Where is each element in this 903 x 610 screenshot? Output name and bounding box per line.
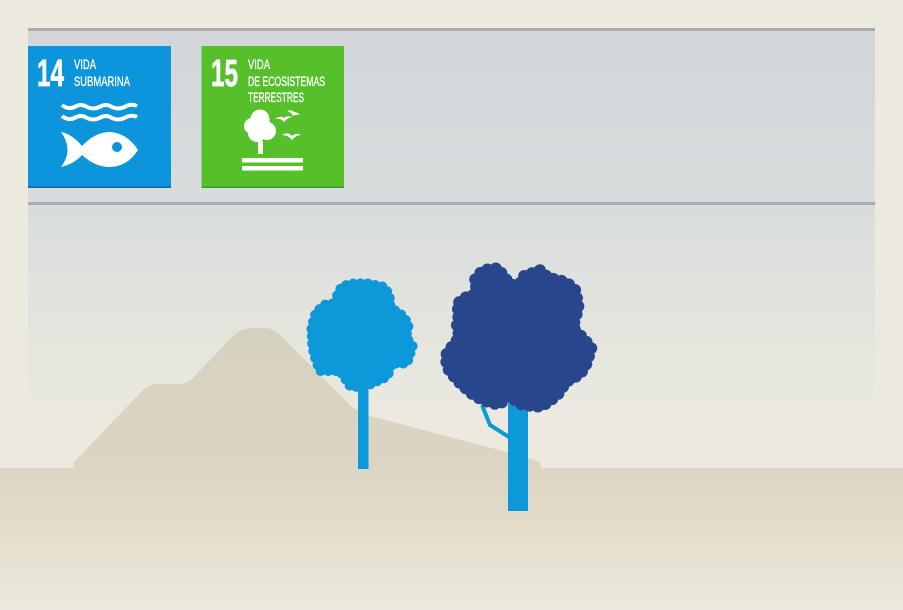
label: vida submarina (74, 56, 130, 89)
badge: SDG 14 life below water (28, 46, 171, 188)
number 14: 14 (37, 53, 64, 95)
label: vida submarina: SUBMARINA (74, 73, 130, 89)
trunk (358, 385, 368, 469)
label: vida submarina: VIDA (74, 56, 96, 72)
icon: tree and birds (242, 110, 303, 170)
label: vida de ecosistemas terrestres: TERRESTRES (248, 89, 304, 105)
ground (0, 468, 903, 610)
trunk (508, 395, 528, 511)
label: vida de ecosistemas terrestres (248, 56, 325, 105)
hills (73, 328, 541, 470)
label: vida de ecosistemas terrestres: VIDA (248, 56, 270, 72)
icon: fish (61, 132, 138, 167)
badge: SDG 15 life on land (202, 46, 344, 188)
branch (482, 405, 509, 437)
label: vida de ecosistemas terrestres: DE ECOSISTEMAS (248, 73, 325, 89)
tree: large navy tree (445, 268, 591, 511)
canopy (445, 268, 591, 407)
icon: waves (62, 105, 137, 120)
panel: sky background (28, 28, 875, 420)
tree: small blue tree (311, 283, 413, 469)
canopy (311, 283, 413, 387)
number 15: 15 (211, 53, 238, 95)
